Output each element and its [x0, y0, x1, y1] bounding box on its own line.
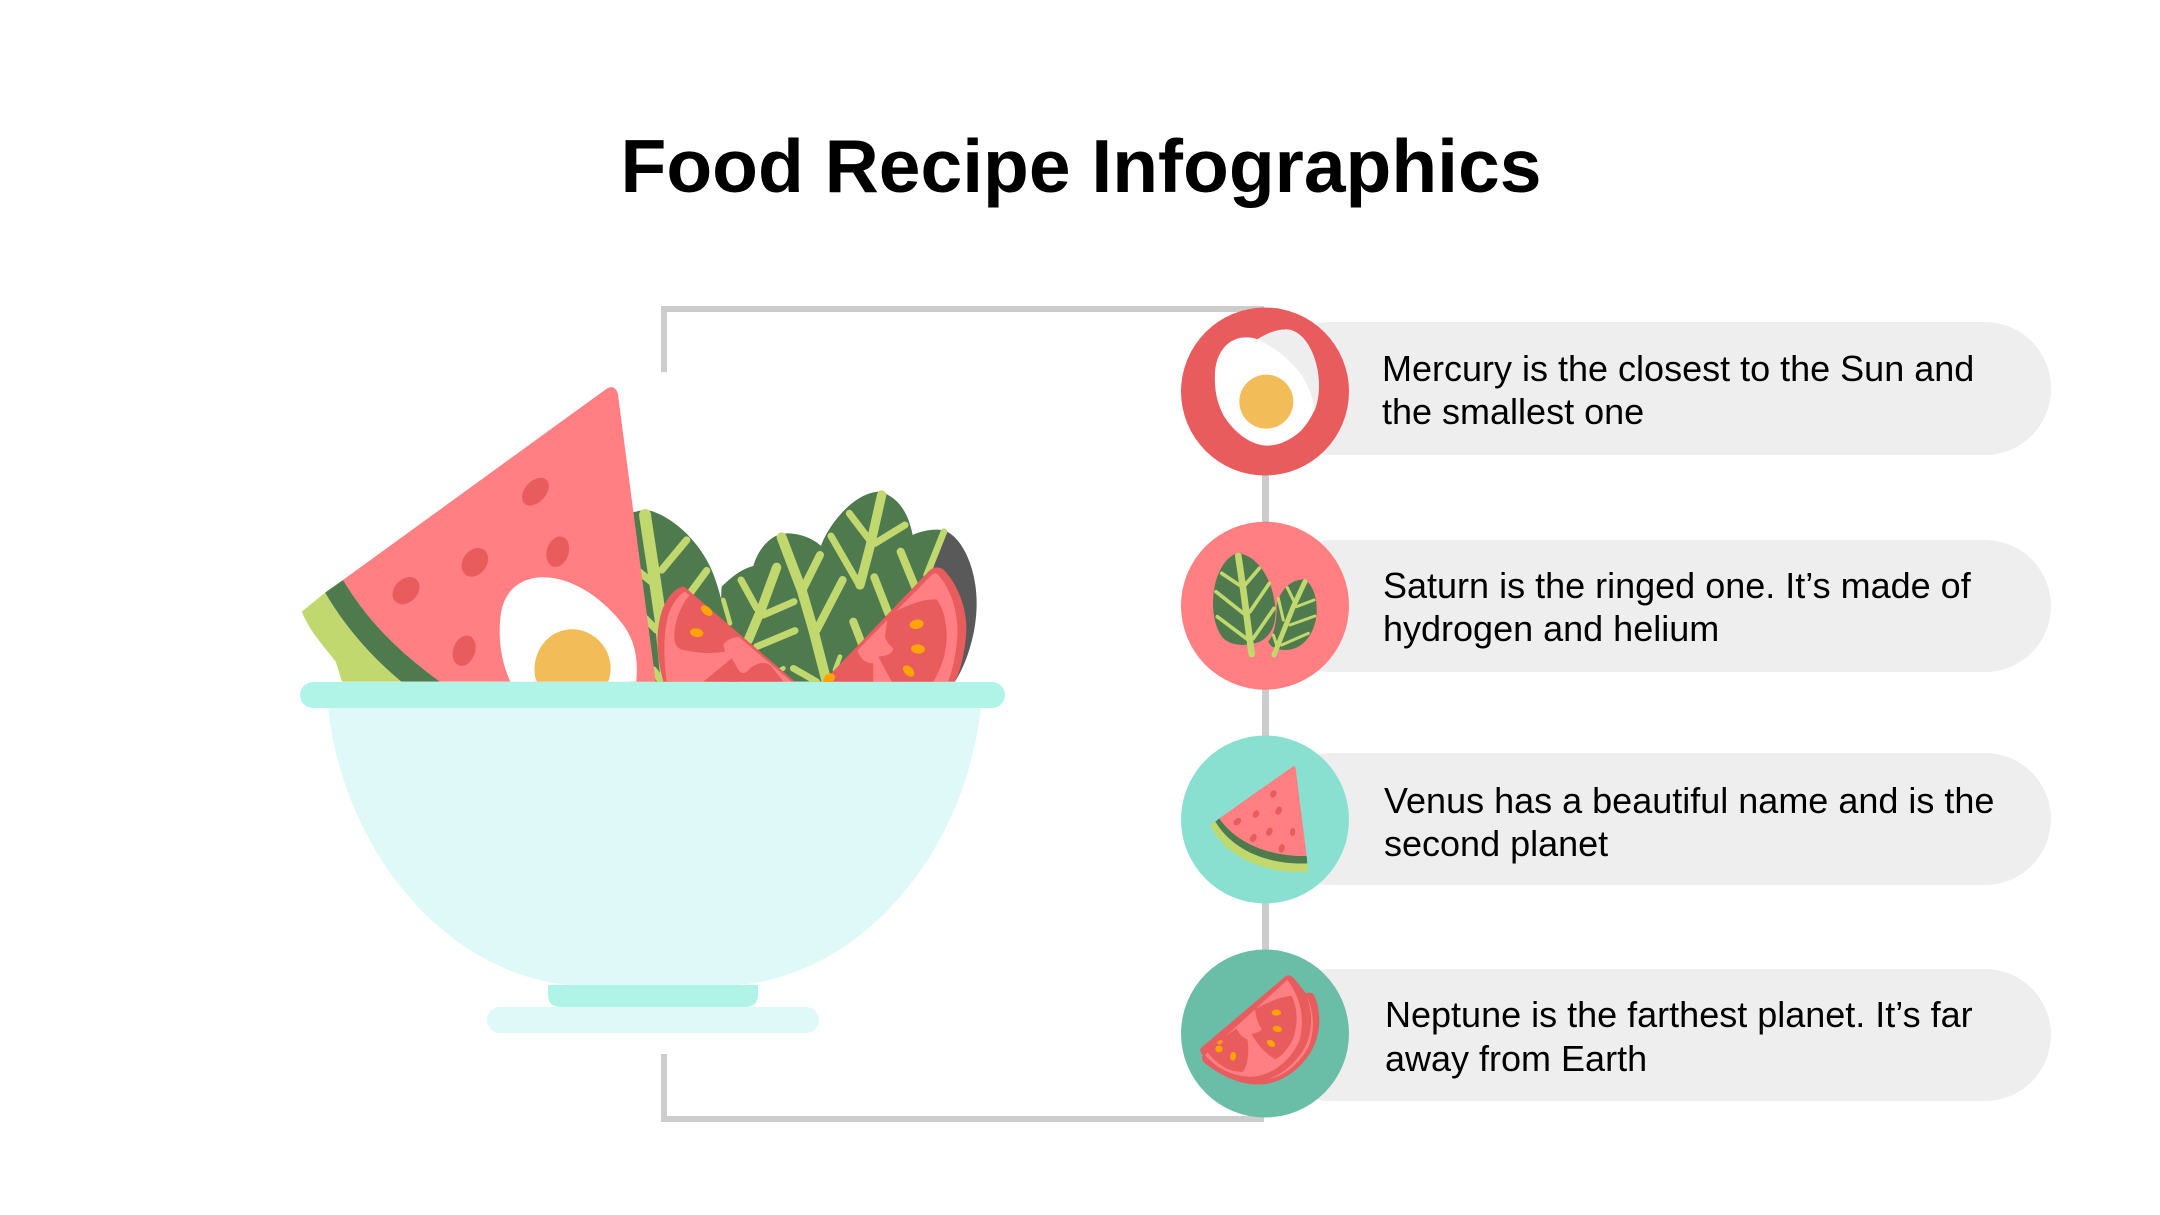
bowl base: [487, 1007, 819, 1033]
dark back leaf and green leaves with veins: [630, 492, 977, 682]
item 1: Mercury: [1181, 308, 2051, 476]
tomato right: [822, 567, 966, 685]
circle: [1181, 308, 1349, 476]
description: Saturn is the ringed one. It’s made of: [1383, 565, 1972, 606]
item 2: Saturn: [1181, 522, 2051, 690]
description: [1384, 780, 1994, 864]
description: Neptune is the farthest planet. It’s far: [1385, 994, 1973, 1035]
circle: [1181, 950, 1349, 1118]
bowl foot: [548, 985, 758, 1007]
egg: [500, 577, 637, 682]
icon: watermelon: [1210, 766, 1308, 872]
description: Venus has a beautiful name and is the: [1384, 780, 1994, 821]
bowl body: [328, 706, 981, 986]
watermelon slice: [302, 387, 656, 682]
description: away from Earth: [1385, 1038, 1647, 1079]
description: [1382, 348, 1974, 432]
item 4: Neptune: [1181, 950, 2051, 1118]
text pill: [1265, 753, 2051, 885]
description: [1385, 994, 1973, 1079]
tomatoes: [657, 567, 966, 685]
text pill: [1265, 540, 2051, 672]
text pill: [1265, 969, 2051, 1101]
circle: [1181, 522, 1349, 690]
tomato left: [657, 587, 795, 682]
item 3: Venus: [1181, 736, 2051, 904]
title: Food Recipe Infographics: [621, 124, 1541, 208]
bowl rim: [300, 682, 1005, 708]
icon: egg: [1215, 329, 1319, 446]
description: second planet: [1384, 823, 1608, 864]
description: the smallest one: [1382, 391, 1644, 432]
icon: spinach leaves: [1213, 553, 1317, 655]
description: [1383, 565, 1972, 649]
bowl illustration: [300, 387, 1005, 1033]
icon: tomato slice: [1200, 975, 1319, 1085]
connector bracket lines: [661, 306, 1269, 1122]
circle: [1181, 736, 1349, 904]
description: hydrogen and helium: [1383, 608, 1719, 649]
salad contents: [302, 387, 977, 685]
description: Mercury is the closest to the Sun and: [1382, 348, 1974, 389]
text pill: [1265, 322, 2051, 455]
